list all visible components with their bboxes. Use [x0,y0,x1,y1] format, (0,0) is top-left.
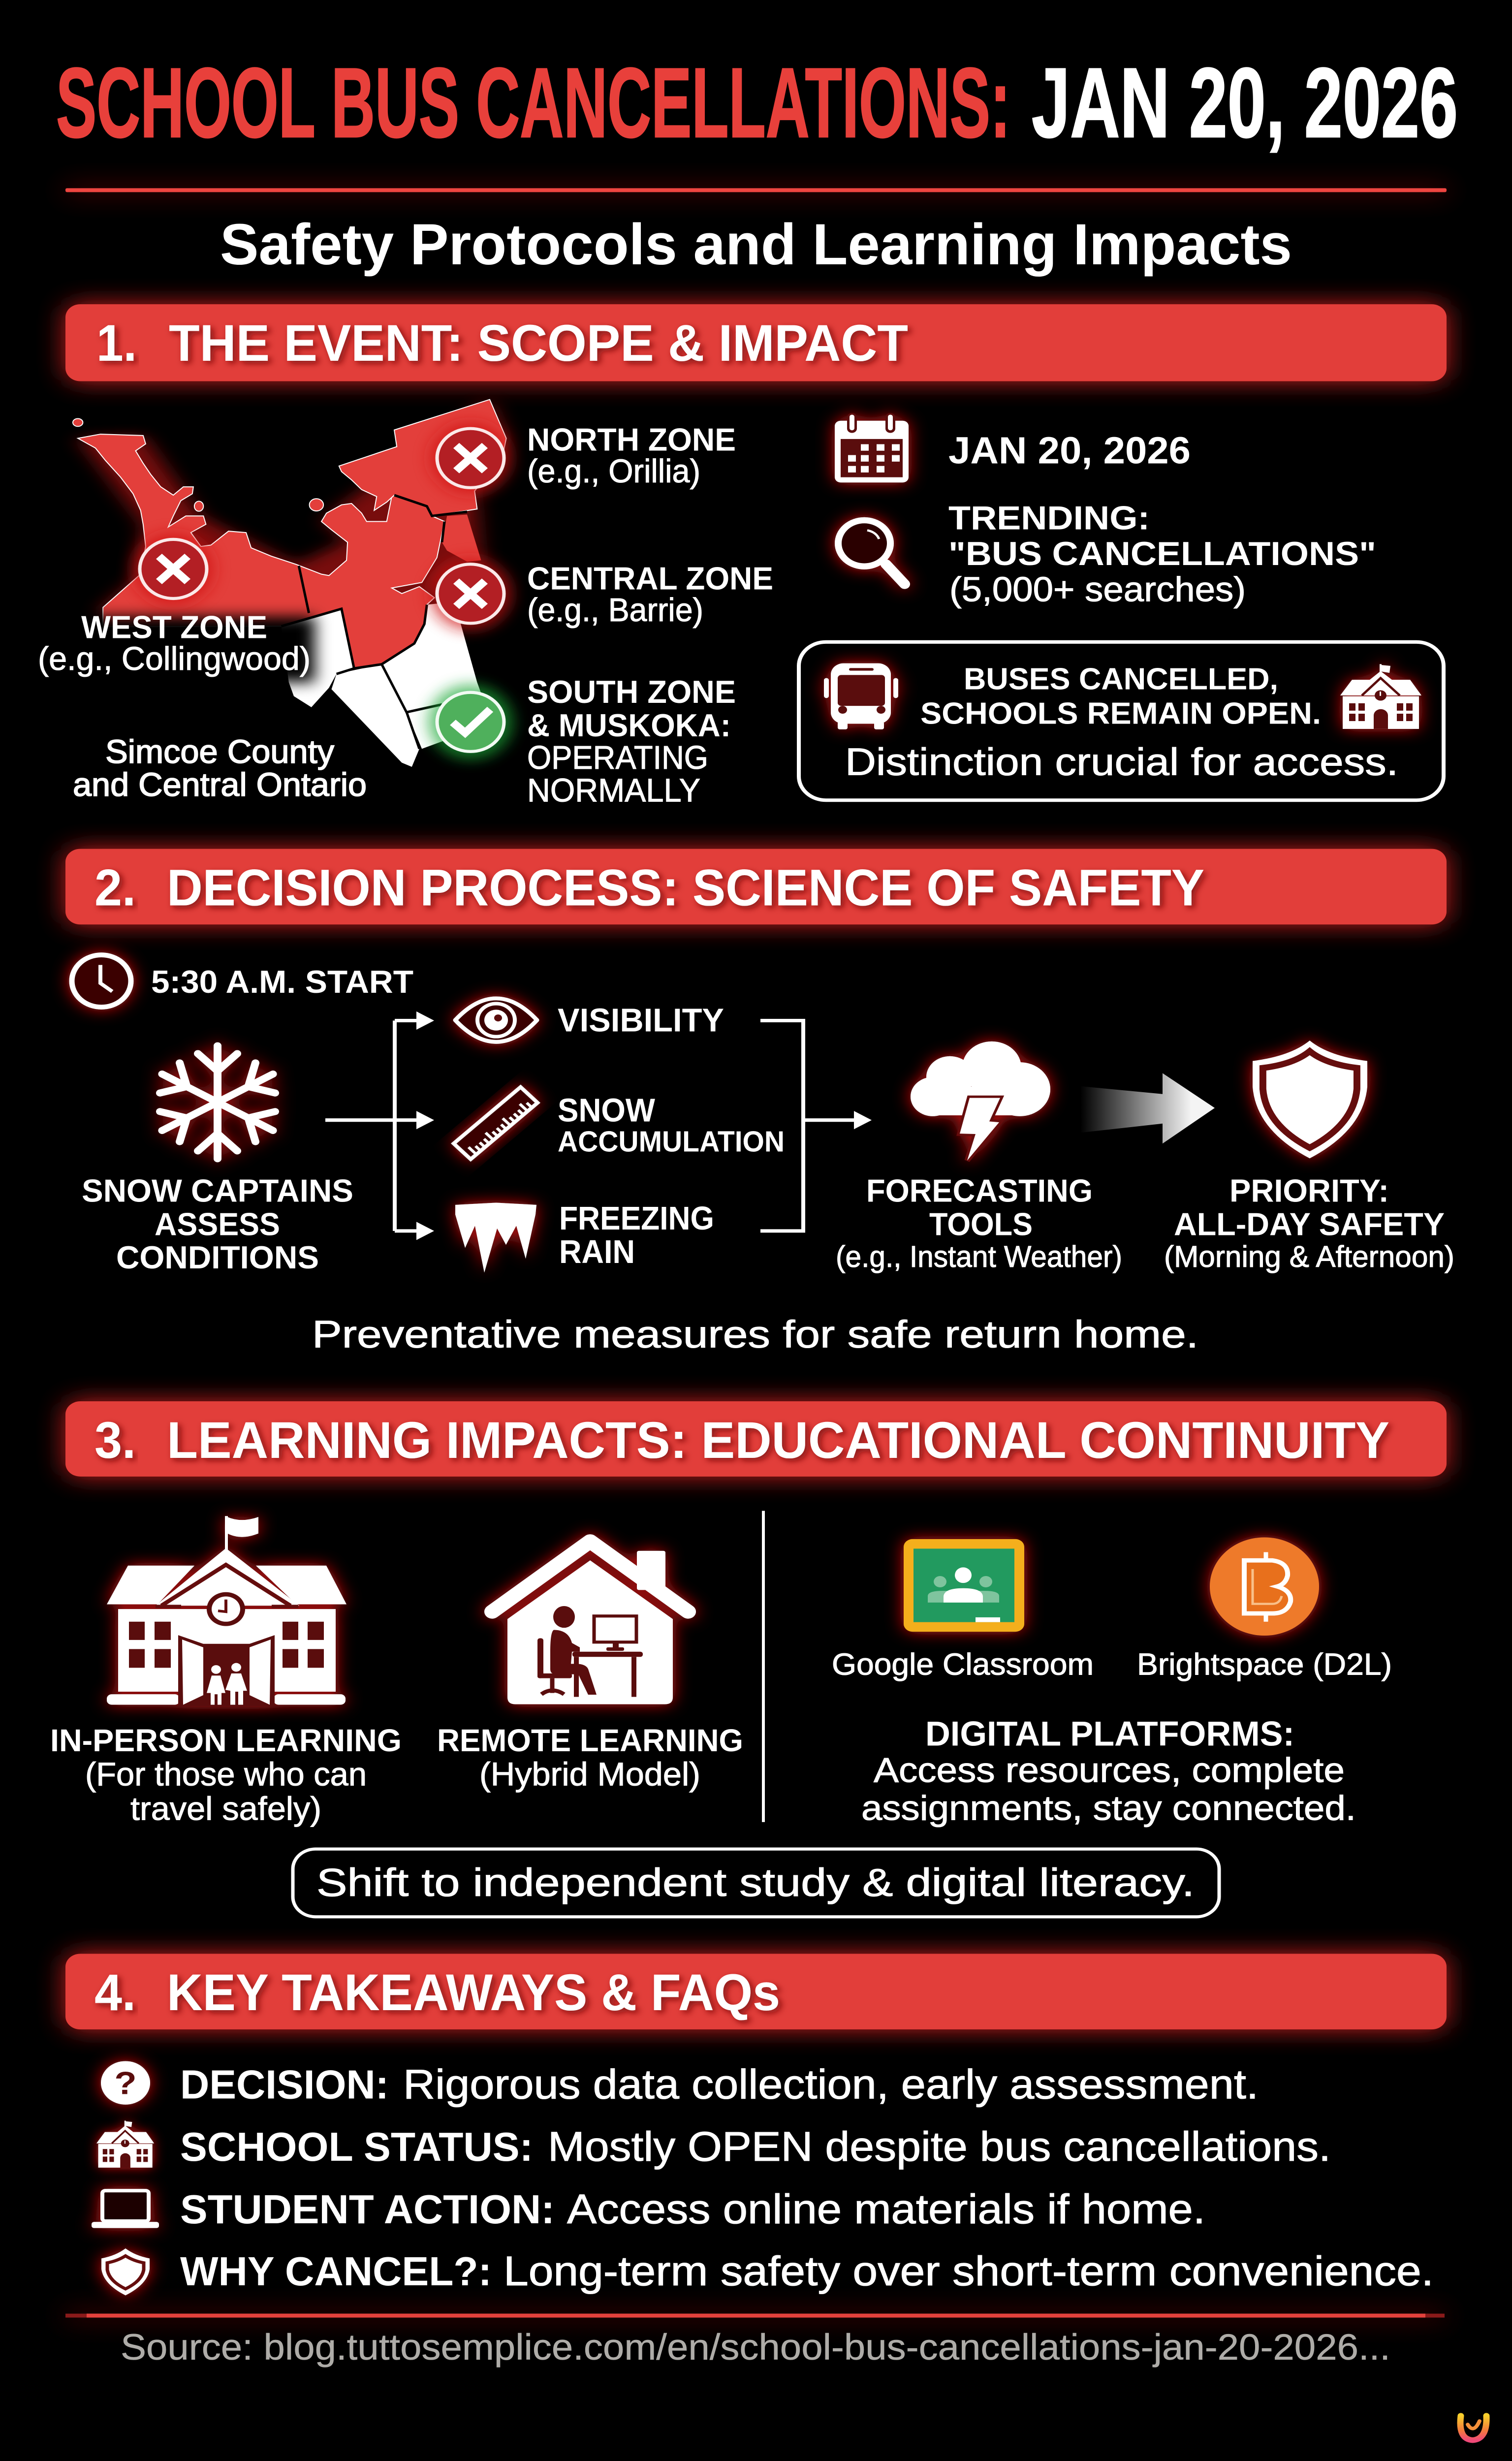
forecasting label: (e.g., Instant Weather) [836,1240,1122,1273]
priority label: (Morning & Afternoon) [1164,1240,1454,1273]
icon: north zone cancelled [429,422,512,495]
flow conclusion: Preventative measures for safe return home. [312,1313,1198,1356]
snow captains label: CONDITIONS [116,1239,319,1275]
south zone label [527,674,736,809]
south zone label: OPERATING [527,739,708,776]
remote learning label: (Hybrid Model) [479,1756,700,1793]
map caption: and Central Ontario [73,766,367,803]
snow captains label: SNOW CAPTAINS [82,1173,353,1209]
callout heading: BUSES CANCELLED, [964,662,1278,696]
takeaway: why cancel: Long-term safety over short-term convenience. [504,2248,1434,2295]
priority label: PRIORITY: [1229,1173,1389,1209]
takeaway: why cancel [101,2248,1434,2296]
freezing rain label: FREEZING [559,1200,714,1237]
section 2 heading bar [65,849,1447,924]
icon: shield [1253,1041,1367,1158]
callout heading [920,662,1321,730]
icon: school [1340,664,1421,729]
takeaway: school status: SCHOOL STATUS: [180,2124,533,2170]
section 3 heading bar [65,1401,1447,1477]
callout: buses vs schools [799,642,1444,800]
snow accumulation label: ACCUMULATION [558,1126,785,1158]
icon: icicles [455,1202,536,1273]
forecasting label [836,1173,1122,1273]
priority label: ALL-DAY SAFETY [1174,1206,1445,1242]
section 4 heading bar: KEY TAKEAWAYS & FAQs [167,1963,780,2021]
zone boundaries [281,495,467,749]
platforms description: Access resources, complete [874,1751,1345,1790]
in-person learning label [50,1724,402,1827]
icon: ruler [454,1087,537,1159]
callout: independent study [293,1849,1219,1917]
remote learning label: REMOTE LEARNING [437,1724,743,1758]
icon: calendar [835,413,909,482]
takeaway: student action: STUDENT ACTION: [180,2186,555,2232]
platforms description: assignments, stay connected. [861,1789,1356,1827]
panel divider [762,1511,765,1822]
panel: digital platforms [832,1537,1392,1827]
map of Simcoe County [25,400,506,767]
section 4 heading bar [65,1954,1447,2029]
section 2 heading bar: DECISION PROCESS: SCIENCE OF SAFETY [167,858,1204,916]
arrow: forecasting to priority [1080,1073,1215,1143]
callout note: Distinction crucial for access. [845,740,1398,783]
icon: eye [455,998,537,1042]
takeaway: student action [92,2186,1205,2233]
arrows: captains to factors [325,1011,434,1240]
south zone label: SOUTH ZONE [527,674,736,710]
trending text: "BUS CANCELLATIONS" [948,535,1376,572]
icon: bus [824,663,898,729]
callout: independent study: Shift to independent study & digital literacy. [316,1861,1195,1904]
freezing rain label: RAIN [559,1233,635,1270]
panel: takeaways [92,2061,1434,2296]
bracket arrow: factors to forecasting [760,1020,872,1231]
snow captains label [82,1173,353,1275]
freezing rain label [559,1200,714,1270]
callout heading: SCHOOLS REMAIN OPEN. [920,696,1321,730]
platforms description [861,1714,1356,1827]
south zone label: & MUSKOKA: [527,707,731,743]
takeaway: why cancel: WHY CANCEL?: [180,2248,492,2294]
north zone label [527,422,736,490]
in-person learning label: (For those who can [85,1756,367,1793]
icon: snowflake [152,1046,283,1159]
icon: central zone cancelled [429,557,512,630]
snow accumulation label [558,1092,785,1158]
platform names: Brightspace (D2L) [1137,1647,1392,1681]
trending text: TRENDING: [948,500,1150,537]
panel: decision flow [72,955,1454,1356]
section 2 heading bar: 2. [94,858,136,916]
platform names [832,1647,1392,1681]
section 1 heading bar: THE EVENT: SCOPE & IMPACT [169,314,908,372]
takeaway: decision: ? [114,2065,137,2101]
section 4 heading bar: 4. [94,1963,136,2021]
trending text: (5,000+ searches) [949,570,1246,608]
visibility label: VISIBILITY [558,1002,724,1039]
in-person learning label: IN-PERSON LEARNING [50,1724,402,1758]
map caption [73,733,367,803]
title divider line [65,188,1447,192]
takeaway: school status: Mostly OPEN despite bus cancellations. [548,2123,1331,2170]
north zone label: NORTH ZONE [527,422,736,458]
icon: storm cloud [911,1041,1050,1161]
snow captains label: ASSESS [155,1206,280,1242]
forecasting label: TOOLS [929,1206,1033,1242]
date text: JAN 20, 2026 [948,430,1191,472]
icon: south zone operating [428,685,513,759]
footer divider line [65,2314,1445,2318]
central zone label: CENTRAL ZONE [527,560,773,596]
platform names: Google Classroom [832,1647,1094,1681]
icon: Brightspace [1210,1537,1319,1636]
west zone label: (e.g., Collingwood) [38,640,311,677]
takeaway: decision: Rigorous data collection, early assessment. [403,2061,1259,2108]
priority label [1164,1173,1454,1273]
west zone label: WEST ZONE [81,609,267,645]
white land [281,609,354,707]
west zone label [38,609,311,677]
source line: Source: blog.tuttosemplice.com/en/school-bus-cancellations-jan-20-2026... [121,2327,1390,2367]
icon: west zone cancelled [132,533,215,605]
red land [78,434,444,668]
central zone label [527,560,773,629]
takeaway: decision: DECISION: [180,2062,389,2107]
in-person learning label: travel safely) [130,1791,321,1827]
snow accumulation label: SNOW [558,1092,655,1129]
panel: zone map [25,400,773,809]
icon: home office [492,1541,688,1704]
icon: corner logo [1460,2416,1486,2440]
north zone label: (e.g., Orillia) [527,453,700,490]
icon: magnifying glass [838,520,905,584]
section 3 heading bar: 3. [94,1411,136,1469]
takeaway: student action: Access online materials if home. [567,2186,1205,2233]
subtitle: Safety Protocols and Learning Impacts [220,212,1292,277]
trending text [948,500,1376,608]
panel: learning modes [50,1516,743,1827]
icon: Google Classroom [904,1539,1024,1632]
forecasting label: FORECASTING [866,1173,1093,1209]
start time [72,955,413,1007]
panel: event facts [799,413,1444,800]
section 1 heading bar [65,304,1447,381]
start time: 5:30 A.M. START [151,964,413,1000]
central zone label: (e.g., Barrie) [527,592,703,629]
platforms description: DIGITAL PLATFORMS: [925,1714,1294,1753]
south zone label: NORMALLY [527,772,700,809]
section 1 heading bar: 1. [96,314,137,372]
remote learning label [437,1724,743,1793]
map caption: Simcoe County [105,733,334,770]
icon: school building [107,1516,346,1706]
takeaway: school status [96,2121,1331,2170]
